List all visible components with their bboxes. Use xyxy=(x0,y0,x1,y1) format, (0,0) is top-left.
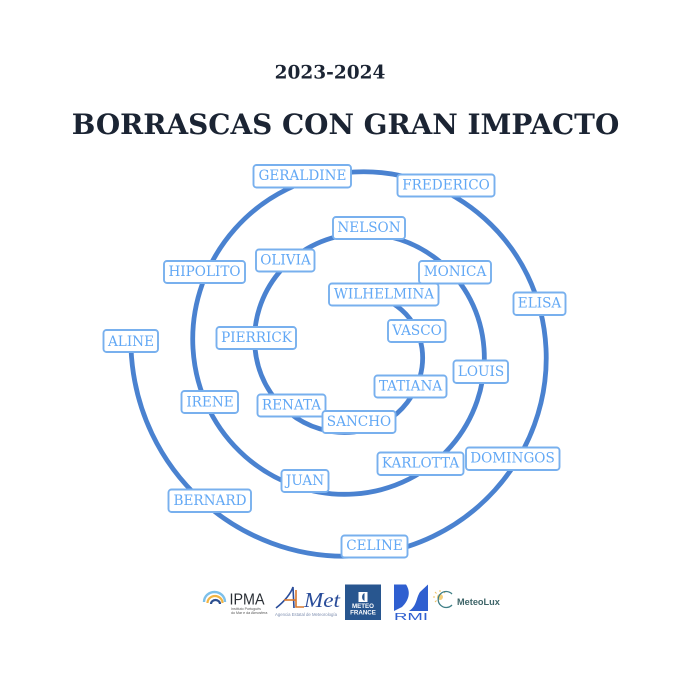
logo: RMI xyxy=(394,584,428,623)
label: Renata: RENATA xyxy=(262,398,321,414)
label: Olivia: OLIVIA xyxy=(260,252,311,268)
label: Pierrick: PIERRICK xyxy=(221,330,293,346)
label: Frederico: FREDERICO xyxy=(402,178,490,194)
logo: Meteo France: METEO xyxy=(352,603,374,610)
label: Olivia xyxy=(256,250,314,272)
label: Elisa xyxy=(514,292,566,315)
label: Hipolito xyxy=(164,261,245,283)
label: Geraldine xyxy=(254,165,351,188)
logo: IPMA: do Mar e da Atmosfera xyxy=(231,611,267,615)
logo: IPMA xyxy=(204,592,267,615)
label: Domingos xyxy=(466,448,560,470)
label: Frederico xyxy=(398,174,494,196)
logo: IPMA: IPMA xyxy=(230,592,265,608)
logo: AEMET: Agencia Estatal de Meteorología xyxy=(275,612,338,617)
label: Irene xyxy=(182,391,238,413)
label: Aline: ALINE xyxy=(107,334,154,350)
label: Wilhelmina: WILHELMINA xyxy=(334,286,434,302)
logo: MeteoLux xyxy=(433,590,501,608)
label: Juan: JUAN xyxy=(284,473,324,489)
label: Nelson xyxy=(333,217,405,239)
label: Monica: MONICA xyxy=(424,264,486,280)
label: Karlotta xyxy=(378,452,464,475)
label: Irene: IRENE xyxy=(186,394,234,410)
label: Monica xyxy=(419,261,491,284)
logo: AEMET xyxy=(275,587,341,617)
logo: AEMET: Met xyxy=(303,588,341,612)
label: Juan xyxy=(282,470,328,492)
label: Geraldine: GERALDINE xyxy=(259,168,346,184)
label: Bernard: BERNARD xyxy=(174,493,247,509)
label: Vasco xyxy=(388,320,446,342)
logo: Meteo France: FRANCE xyxy=(350,610,376,616)
label: Sancho: SANCHO xyxy=(327,414,391,430)
label: Louis: LOUIS xyxy=(458,364,504,380)
label: Tatiana: TATIANA xyxy=(379,378,442,394)
spiral track xyxy=(131,172,546,556)
label: Vasco: VASCO xyxy=(391,323,442,339)
label: Domingos: DOMINGOS xyxy=(470,450,555,466)
label: Celine xyxy=(342,536,408,558)
label: Karlotta: KARLOTTA xyxy=(382,456,459,472)
logo: RMI: RMI xyxy=(394,611,428,623)
label: Renata xyxy=(258,394,326,416)
label: Nelson: NELSON xyxy=(337,220,401,236)
subtitle: years: 2023-2024 xyxy=(275,62,385,84)
logo: IPMA: Instituto Português xyxy=(231,607,261,611)
logo: MeteoLux: MeteoLux xyxy=(457,597,501,607)
title: BORRASCAS CON GRAN IMPACTO xyxy=(72,108,619,141)
label: Louis xyxy=(454,360,508,383)
label: Bernard xyxy=(168,490,251,512)
label: Celine: CELINE xyxy=(346,538,403,554)
label: Hipolito: HIPOLITO xyxy=(168,264,241,280)
label: Tatiana xyxy=(374,376,446,398)
label: Sancho xyxy=(322,411,396,433)
label: Wilhelmina xyxy=(329,284,438,306)
label: Elisa: ELISA xyxy=(518,296,561,312)
label: Aline xyxy=(104,330,158,352)
label: Pierrick xyxy=(216,327,296,349)
logo: Meteo France xyxy=(345,584,381,620)
